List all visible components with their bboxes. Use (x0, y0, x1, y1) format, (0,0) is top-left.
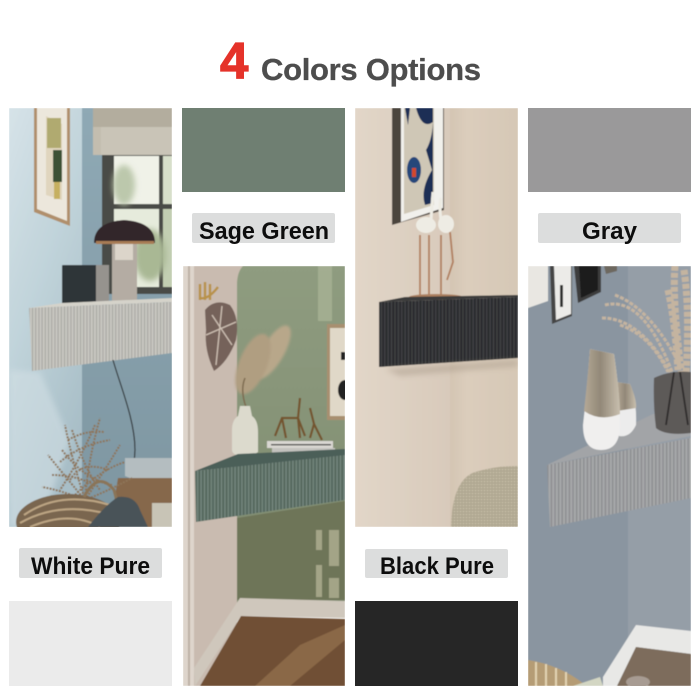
wood floor (617, 647, 691, 686)
cushion (573, 677, 603, 686)
left wall (9, 108, 84, 527)
panel: white shelf photo (9, 108, 172, 550)
gray ribbed shelf front (547, 438, 691, 527)
white ribbed shelf front (29, 302, 172, 371)
glass vase (654, 372, 691, 434)
left wall (355, 108, 451, 527)
dried plant (42, 418, 132, 500)
framed art (34, 108, 70, 226)
swatch: white (9, 601, 172, 686)
pampas grass (234, 324, 292, 406)
baseboard (125, 458, 172, 480)
cable (113, 360, 135, 480)
baseboard (603, 625, 691, 686)
knit pouf (451, 466, 518, 527)
label: Sage Green: Sage Green (199, 218, 329, 245)
window (102, 154, 172, 294)
flamingo figurines (416, 192, 454, 298)
left wall (528, 266, 630, 686)
label: Black Pure: Black Pure (380, 553, 494, 580)
label: White Pure: White Pure (31, 553, 150, 580)
wall sunlight patch (9, 370, 70, 527)
wicker basket (528, 660, 584, 686)
gray shelf top (547, 410, 691, 465)
herringbone floor (200, 616, 345, 686)
title words: Colors Options (261, 52, 481, 87)
rug (152, 503, 172, 527)
tall two-tone vase (583, 349, 620, 450)
title (220, 32, 481, 89)
red numeral 4: 4 (220, 32, 249, 89)
small two-tone vase (616, 382, 636, 436)
swatch: gray (528, 108, 691, 192)
plaid hat (205, 302, 237, 371)
label: Gray: Gray (582, 218, 638, 245)
gray blanket (88, 497, 148, 527)
object on floor (626, 676, 650, 688)
art frame (326, 324, 345, 420)
wall hook (200, 282, 218, 300)
door molding (183, 266, 194, 686)
wood floor (110, 478, 172, 527)
right wall (450, 108, 518, 527)
wicker basket (16, 480, 120, 527)
panel: sage green shelf photo (183, 266, 352, 686)
lower green wall (237, 501, 345, 600)
swatch: sage green (182, 108, 345, 192)
right wall (82, 108, 172, 527)
green shelf top (195, 449, 345, 471)
baseboard (194, 598, 345, 686)
window blind (93, 108, 172, 155)
panel: gray shelf photo (528, 266, 691, 688)
beige wall (194, 266, 243, 686)
black ribbed shelf front (379, 297, 518, 367)
pampas grass (602, 266, 688, 380)
table lamp (94, 220, 155, 301)
black shelf top (379, 295, 518, 302)
panel: black shelf photo (355, 108, 518, 527)
shelf shadow (385, 360, 518, 376)
copper base plate (409, 294, 463, 300)
label: Gray (538, 213, 681, 245)
ceramic vase (232, 406, 258, 456)
framed art (392, 108, 444, 225)
speaker (62, 265, 109, 305)
light reflection (316, 530, 339, 598)
right wall (628, 266, 691, 686)
deer figurines (275, 398, 322, 440)
stacked books (267, 441, 335, 456)
green ribbed shelf front (195, 455, 345, 522)
sunlight stripe on wall (318, 266, 332, 321)
wall pictures (528, 266, 617, 324)
green wall (237, 266, 345, 616)
swatch: black (355, 601, 518, 686)
wall shelf top (29, 298, 172, 308)
